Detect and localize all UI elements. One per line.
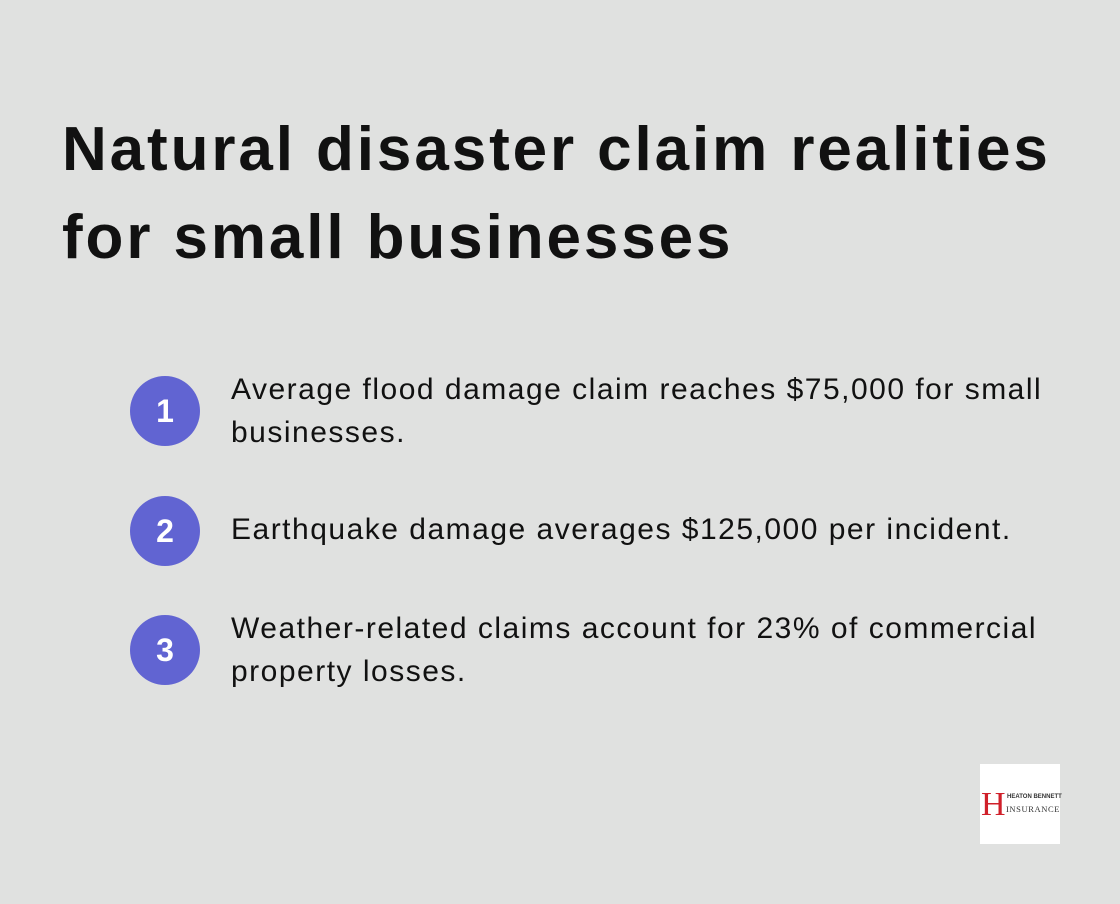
title: Natural disaster claim realities [62,115,1051,184]
logo: HEATON BENNETT [1007,794,1062,800]
text 3: Weather-related claims account for 23% of commercial property losses. [231,612,1037,688]
logo: H [981,786,1006,823]
badge 2 [130,496,200,566]
badge 2: 2 [156,513,174,549]
item 2 [130,496,1012,566]
badge 1: 1 [156,393,174,429]
badge 1 [130,376,200,446]
title: for small businesses [62,203,733,272]
logo [980,764,1060,844]
badge 3 [130,615,200,685]
item 1 [130,373,1042,449]
text 2: Earthquake damage averages $125,000 per incident. [231,513,1012,546]
badge 3: 3 [156,632,174,668]
item 3 [130,612,1037,688]
title [62,115,1051,272]
logo: INSURANCE [1006,804,1060,814]
text 1: Average flood damage claim reaches $75,000 for small businesses. [231,373,1042,449]
